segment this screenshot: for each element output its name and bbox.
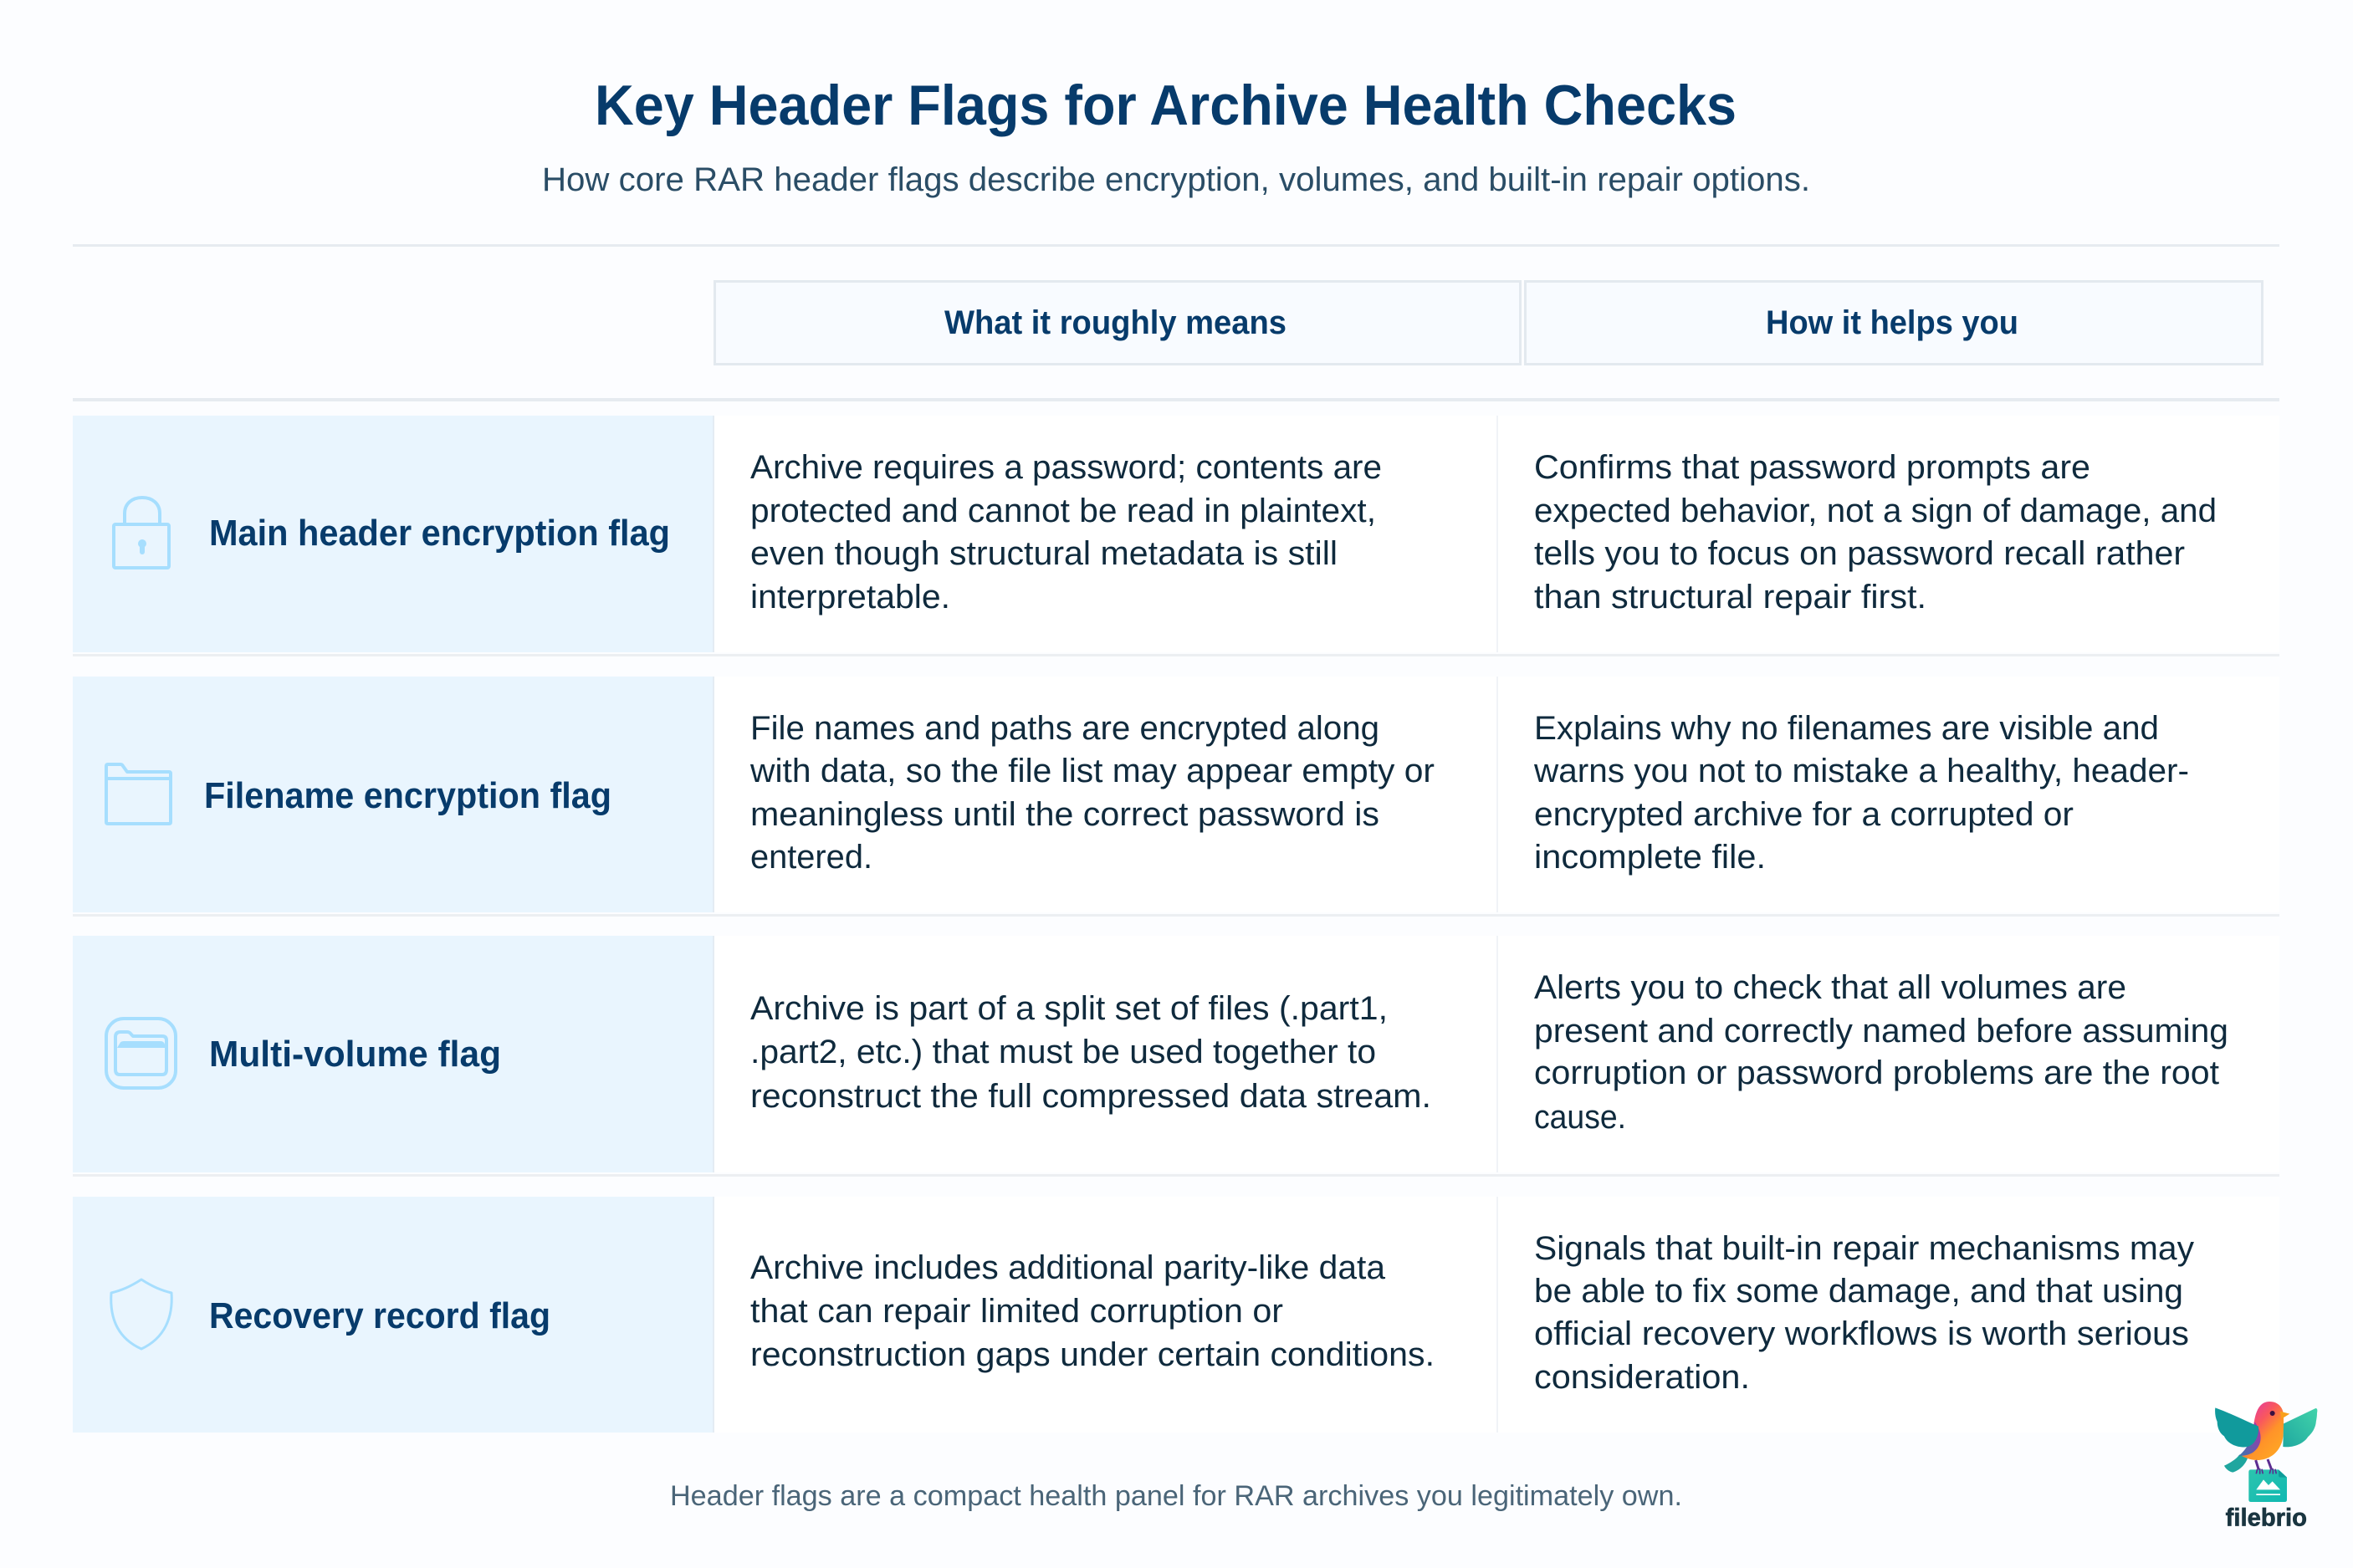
meaning text: even though structural metadata is still — [750, 535, 1338, 572]
title: Key Header Flags for Archive Health Checks — [595, 74, 1737, 137]
benefit text: tells you to focus on password recall rather — [1534, 535, 2185, 572]
benefit text: Confirms that password prompts are — [1534, 449, 2090, 486]
benefit text: Alerts you to check that all volumes are — [1534, 969, 2126, 1006]
logo: filebrio bird — [2215, 1402, 2317, 1531]
icon: shield — [111, 1279, 171, 1349]
meaning text: .part2, etc.) that must be used together to — [750, 1034, 1376, 1070]
benefit text — [1533, 710, 2189, 876]
row label: Multi-volume flag — [209, 1034, 501, 1075]
meaning text — [750, 1249, 1435, 1373]
column header: what it roughly means: What it roughly means — [944, 304, 1286, 341]
meaning text: interpretable. — [750, 579, 950, 615]
meaning text — [749, 710, 1435, 876]
meaning text: entered. — [750, 839, 872, 876]
meaning text — [750, 449, 1382, 615]
benefit text: than structural repair first. — [1534, 579, 1926, 615]
icon: padlock — [114, 498, 169, 568]
meaning text: protected and cannot be read in plaintext, — [750, 493, 1376, 529]
column header: how it helps you — [1526, 281, 2262, 365]
meaning text: reconstruct the full compressed data stream. — [750, 1078, 1431, 1115]
meaning text: Archive requires a password; contents are — [750, 449, 1382, 486]
logo: filebrio bird: filebrio — [2226, 1504, 2307, 1531]
meaning text: Archive is part of a split set of files (.part1, — [750, 990, 1388, 1027]
meaning text: that can repair limited corruption or — [750, 1293, 1283, 1330]
benefit text — [1534, 449, 2217, 615]
meaning text: File names and paths are encrypted along — [750, 710, 1379, 747]
row: main header encryption flag — [73, 416, 2279, 652]
column header: how it helps you: How it helps you — [1766, 304, 2018, 341]
benefit text: incomplete file. — [1534, 839, 1766, 876]
meaning text: with data, so the file list may appear empty or — [749, 753, 1435, 789]
benefit text — [1534, 969, 2228, 1136]
subtitle: How core RAR header flags describe encryption, volumes, and built-in repair options. — [542, 161, 1810, 198]
benefit text: corruption or password problems are the root — [1534, 1055, 2219, 1091]
benefit text: encrypted archive for a corrupted or — [1534, 796, 2074, 833]
column header: what it roughly means — [714, 281, 1521, 365]
meaning text: reconstruction gaps under certain conditions. — [750, 1336, 1435, 1373]
icon: folder — [106, 764, 171, 824]
row: filename encryption flag — [73, 677, 2279, 912]
row: multi-volume flag — [73, 936, 2279, 1172]
meaning text: meaningless until the correct password is — [750, 796, 1379, 833]
meaning text — [750, 990, 1431, 1115]
row label: Main header encryption flag — [209, 513, 670, 554]
row label: Filename encryption flag — [204, 775, 611, 816]
icon: volumes folder — [106, 1019, 176, 1088]
row: recovery record flag — [73, 1197, 2279, 1433]
benefit text: Signals that built-in repair mechanisms may — [1534, 1230, 2194, 1267]
benefit text: warns you not to mistake a healthy, header- — [1533, 753, 2189, 789]
meaning text: Archive includes additional parity-like data — [750, 1249, 1386, 1286]
benefit text: consideration. — [1534, 1359, 1750, 1396]
benefit text: present and correctly named before assuming — [1534, 1013, 2228, 1050]
benefit text: be able to fix some damage, and that using — [1534, 1273, 2183, 1310]
benefit text: official recovery workflows is worth serious — [1534, 1315, 2189, 1352]
row label: Recovery record flag — [209, 1295, 550, 1336]
footer note: Header flags are a compact health panel for RAR archives you legitimately own. — [670, 1480, 1682, 1512]
benefit text: Explains why no filenames are visible and — [1534, 710, 2159, 747]
benefit text — [1534, 1230, 2194, 1396]
benefit text: cause. — [1534, 1099, 1626, 1136]
benefit text: expected behavior, not a sign of damage, and — [1534, 493, 2217, 529]
